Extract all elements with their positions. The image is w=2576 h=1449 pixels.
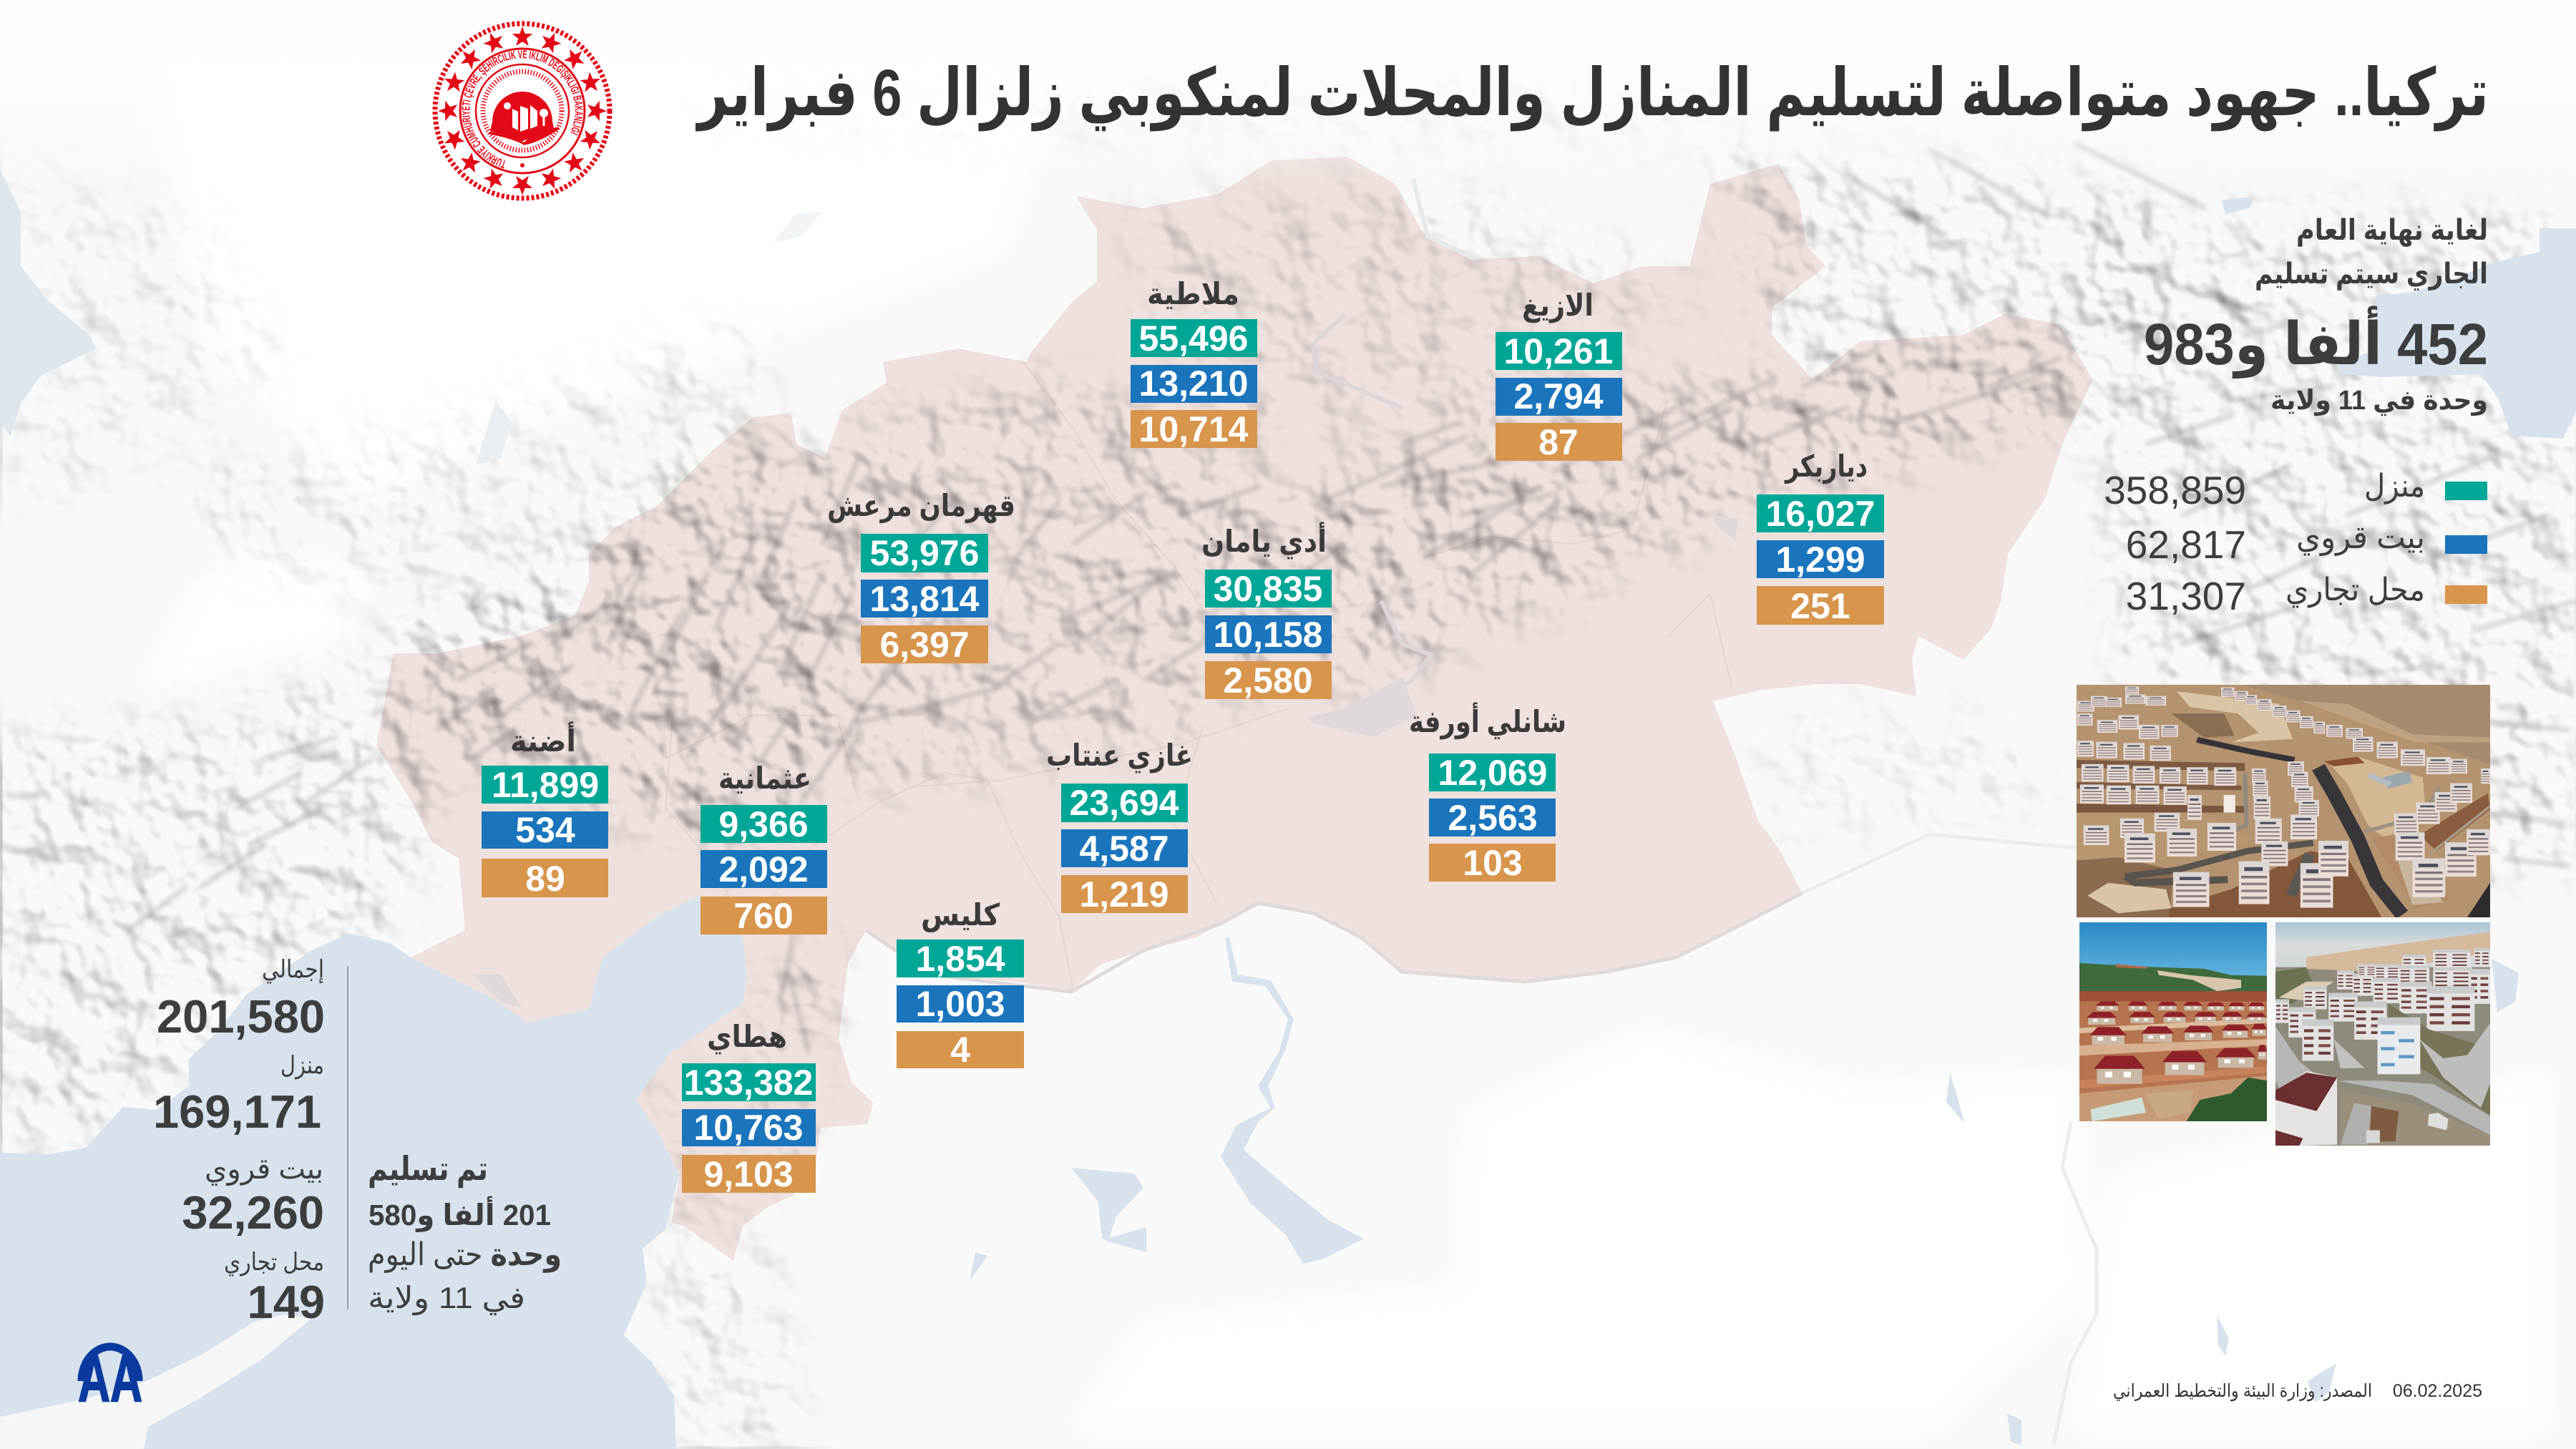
- province: Adana: أضنة: [510, 721, 576, 758]
- logo: Anadolu Agency: [78, 1342, 142, 1415]
- province: Diyarbakir: 251: [1790, 586, 1850, 626]
- province: Sanliurfa: 2,563: [1448, 798, 1538, 838]
- legend row: shop: 31,307: [2126, 574, 2246, 618]
- province: Kilis: 4: [950, 1030, 970, 1070]
- province: Adana: 11,899: [492, 765, 599, 805]
- province: Diyarbakir: [1757, 449, 1884, 626]
- text block: delivered to date: وحدة حتى اليوم: [368, 1237, 562, 1273]
- map: fade near top: [0, 0, 2576, 186]
- province: Malatya: 13,210: [1139, 364, 1248, 404]
- province: Kilis: كليس: [921, 898, 1000, 932]
- province: Adiyaman: [1201, 522, 1332, 701]
- shop label and value: 149: [248, 1276, 325, 1328]
- province: Kilis: 1,003: [915, 984, 1005, 1024]
- province: Kahramanmaras: 13,814: [870, 579, 980, 619]
- shop label and value: [224, 1249, 325, 1328]
- house label and value: 169,171: [153, 1085, 321, 1138]
- legend row: village house: [2126, 520, 2487, 567]
- legend row: village house: 62,817: [2126, 522, 2246, 567]
- legend row: village house: بيت قروي: [2296, 520, 2425, 556]
- text block: delivered to date: تم تسليم: [368, 1150, 488, 1188]
- text block: delivered to date: 201 ألفا و580: [369, 1196, 551, 1233]
- province: Kilis: 1,854: [915, 939, 1005, 979]
- map: affected provinces region: [376, 157, 2093, 1261]
- province: Osmaniye: 2,092: [718, 849, 809, 889]
- text block: delivered to date: في 11 ولاية: [368, 1281, 525, 1316]
- shop label and value: محل تجاري: [224, 1249, 324, 1276]
- logo: ministry seal: TÜRKİYE CUMHURİYETİ ÇEVRE, ŞEHİRCİLİK VE İKLİM DEĞİŞİKLİĞİ BAKANLIĞI: [461, 50, 582, 169]
- legend row: shop: محل تجاري: [2285, 572, 2425, 608]
- village house label and value: [182, 1153, 324, 1239]
- house label and value: منزل: [280, 1052, 324, 1080]
- province: Sanliurfa: [1409, 702, 1566, 883]
- province: Gaziantep: 4,587: [1079, 829, 1169, 869]
- logo: Anadolu Agency: AA: [78, 1342, 142, 1415]
- photo: apartment blocks with road: [2275, 922, 2490, 1146]
- province: Sanliurfa: 103: [1463, 843, 1523, 883]
- source and date: المصدر: وزارة البيئة والتخطيط العمراني: [2113, 1381, 2372, 1402]
- text: until the end of the year: لغاية نهاية العام: [2296, 215, 2488, 247]
- province: Adiyaman: 10,158: [1214, 615, 1322, 655]
- legend row: shop: [2126, 572, 2487, 618]
- text: units in 11 provinces: وحدة في 11 ولاية: [2270, 386, 2488, 416]
- total label and value: 201,580: [157, 990, 325, 1043]
- province: Adana: 534: [515, 810, 575, 850]
- province: Gaziantep: 1,219: [1079, 874, 1169, 914]
- village house label and value: 32,260: [182, 1186, 324, 1239]
- photo: aerial view of new housing estate: [2077, 685, 2490, 917]
- big number: 452 ألفا و983: [2144, 306, 2488, 379]
- province: Malatya: 55,496: [1139, 318, 1248, 358]
- province: Kahramanmaras: 6,397: [879, 625, 970, 665]
- total label and value: [157, 956, 325, 1043]
- province: Gaziantep: غازي عنتاب: [1046, 738, 1193, 773]
- province: Osmaniye: 9,366: [718, 804, 809, 844]
- village house label and value: بيت قروي: [205, 1153, 323, 1186]
- photo: village houses with red roofs: [2079, 922, 2267, 1121]
- map: Mediterranean sea: [0, 896, 747, 1449]
- province: Sanliurfa: 12,069: [1438, 753, 1547, 793]
- map: dark ridges: [129, 143, 2576, 1052]
- province: Adana: [482, 721, 608, 899]
- province: Gaziantep: 23,694: [1070, 783, 1179, 823]
- legend row: house: منزل: [2364, 469, 2425, 504]
- province: Elazig: 10,261: [1504, 331, 1613, 371]
- province: Kahramanmaras: [827, 489, 1015, 665]
- legend row: house: [2104, 468, 2487, 512]
- panel: upcoming deliveries summary: [2144, 215, 2488, 416]
- province: Hatay: 133,382: [684, 1063, 813, 1103]
- province: Elazig: 87: [1538, 422, 1579, 462]
- province: Elazig: الازيغ: [1522, 288, 1594, 323]
- province: Osmaniye: عثمانية: [718, 761, 811, 795]
- text block: delivered to date: [368, 1150, 562, 1316]
- legend: [2104, 468, 2487, 618]
- province: Diyarbakir: 1,299: [1775, 540, 1865, 580]
- province: Sanliurfa: شانلي أورفة: [1409, 702, 1566, 740]
- province: Diyarbakir: 16,027: [1766, 494, 1875, 534]
- province: Hatay: 10,763: [694, 1108, 803, 1148]
- province: Elazig: 2,794: [1513, 376, 1604, 416]
- text: will be delivered: الجاري سيتم تسليم: [2255, 258, 2488, 291]
- map: Cyprus: [0, 1314, 312, 1449]
- total label and value: إجمالي: [262, 956, 324, 984]
- province: Hatay: [682, 1020, 816, 1194]
- province: Adiyaman: 2,580: [1223, 660, 1313, 701]
- province: Adiyaman: 30,835: [1214, 569, 1322, 609]
- legend row: house: 358,859: [2104, 468, 2246, 512]
- house label and value: [153, 1052, 324, 1138]
- province: Hatay: 9,103: [703, 1154, 794, 1194]
- province: Osmaniye: [701, 761, 827, 936]
- panel: delivered so far totals: [153, 956, 325, 1328]
- province: Diyarbakir: دياربكر: [1784, 449, 1868, 484]
- divider line: [347, 966, 348, 1309]
- province: Malatya: [1131, 277, 1257, 449]
- province: Adiyaman: أدي يامان: [1201, 522, 1327, 559]
- province: Hatay: هطاي: [707, 1020, 787, 1054]
- province: Elazig: [1496, 288, 1622, 462]
- province: Kilis: [897, 898, 1024, 1070]
- logo: ministry seal: [432, 21, 613, 200]
- province: Kahramanmaras: 53,976: [870, 533, 979, 573]
- map: province borders: [665, 362, 1732, 992]
- province: Malatya: 10,714: [1139, 409, 1249, 449]
- map: Syria-Iraq and Turkey borders: [866, 834, 2147, 1445]
- province: Osmaniye: 760: [733, 896, 794, 936]
- province: Malatya: ملاطية: [1147, 277, 1239, 311]
- map: dam lakes on the pink region: [1309, 179, 1474, 719]
- province: Kahramanmaras: قهرمان مرعش: [827, 489, 1015, 524]
- source and date: 06.02.2025: [2393, 1381, 2482, 1401]
- province: Gaziantep: [1046, 738, 1193, 914]
- province: Adana: 89: [525, 859, 565, 899]
